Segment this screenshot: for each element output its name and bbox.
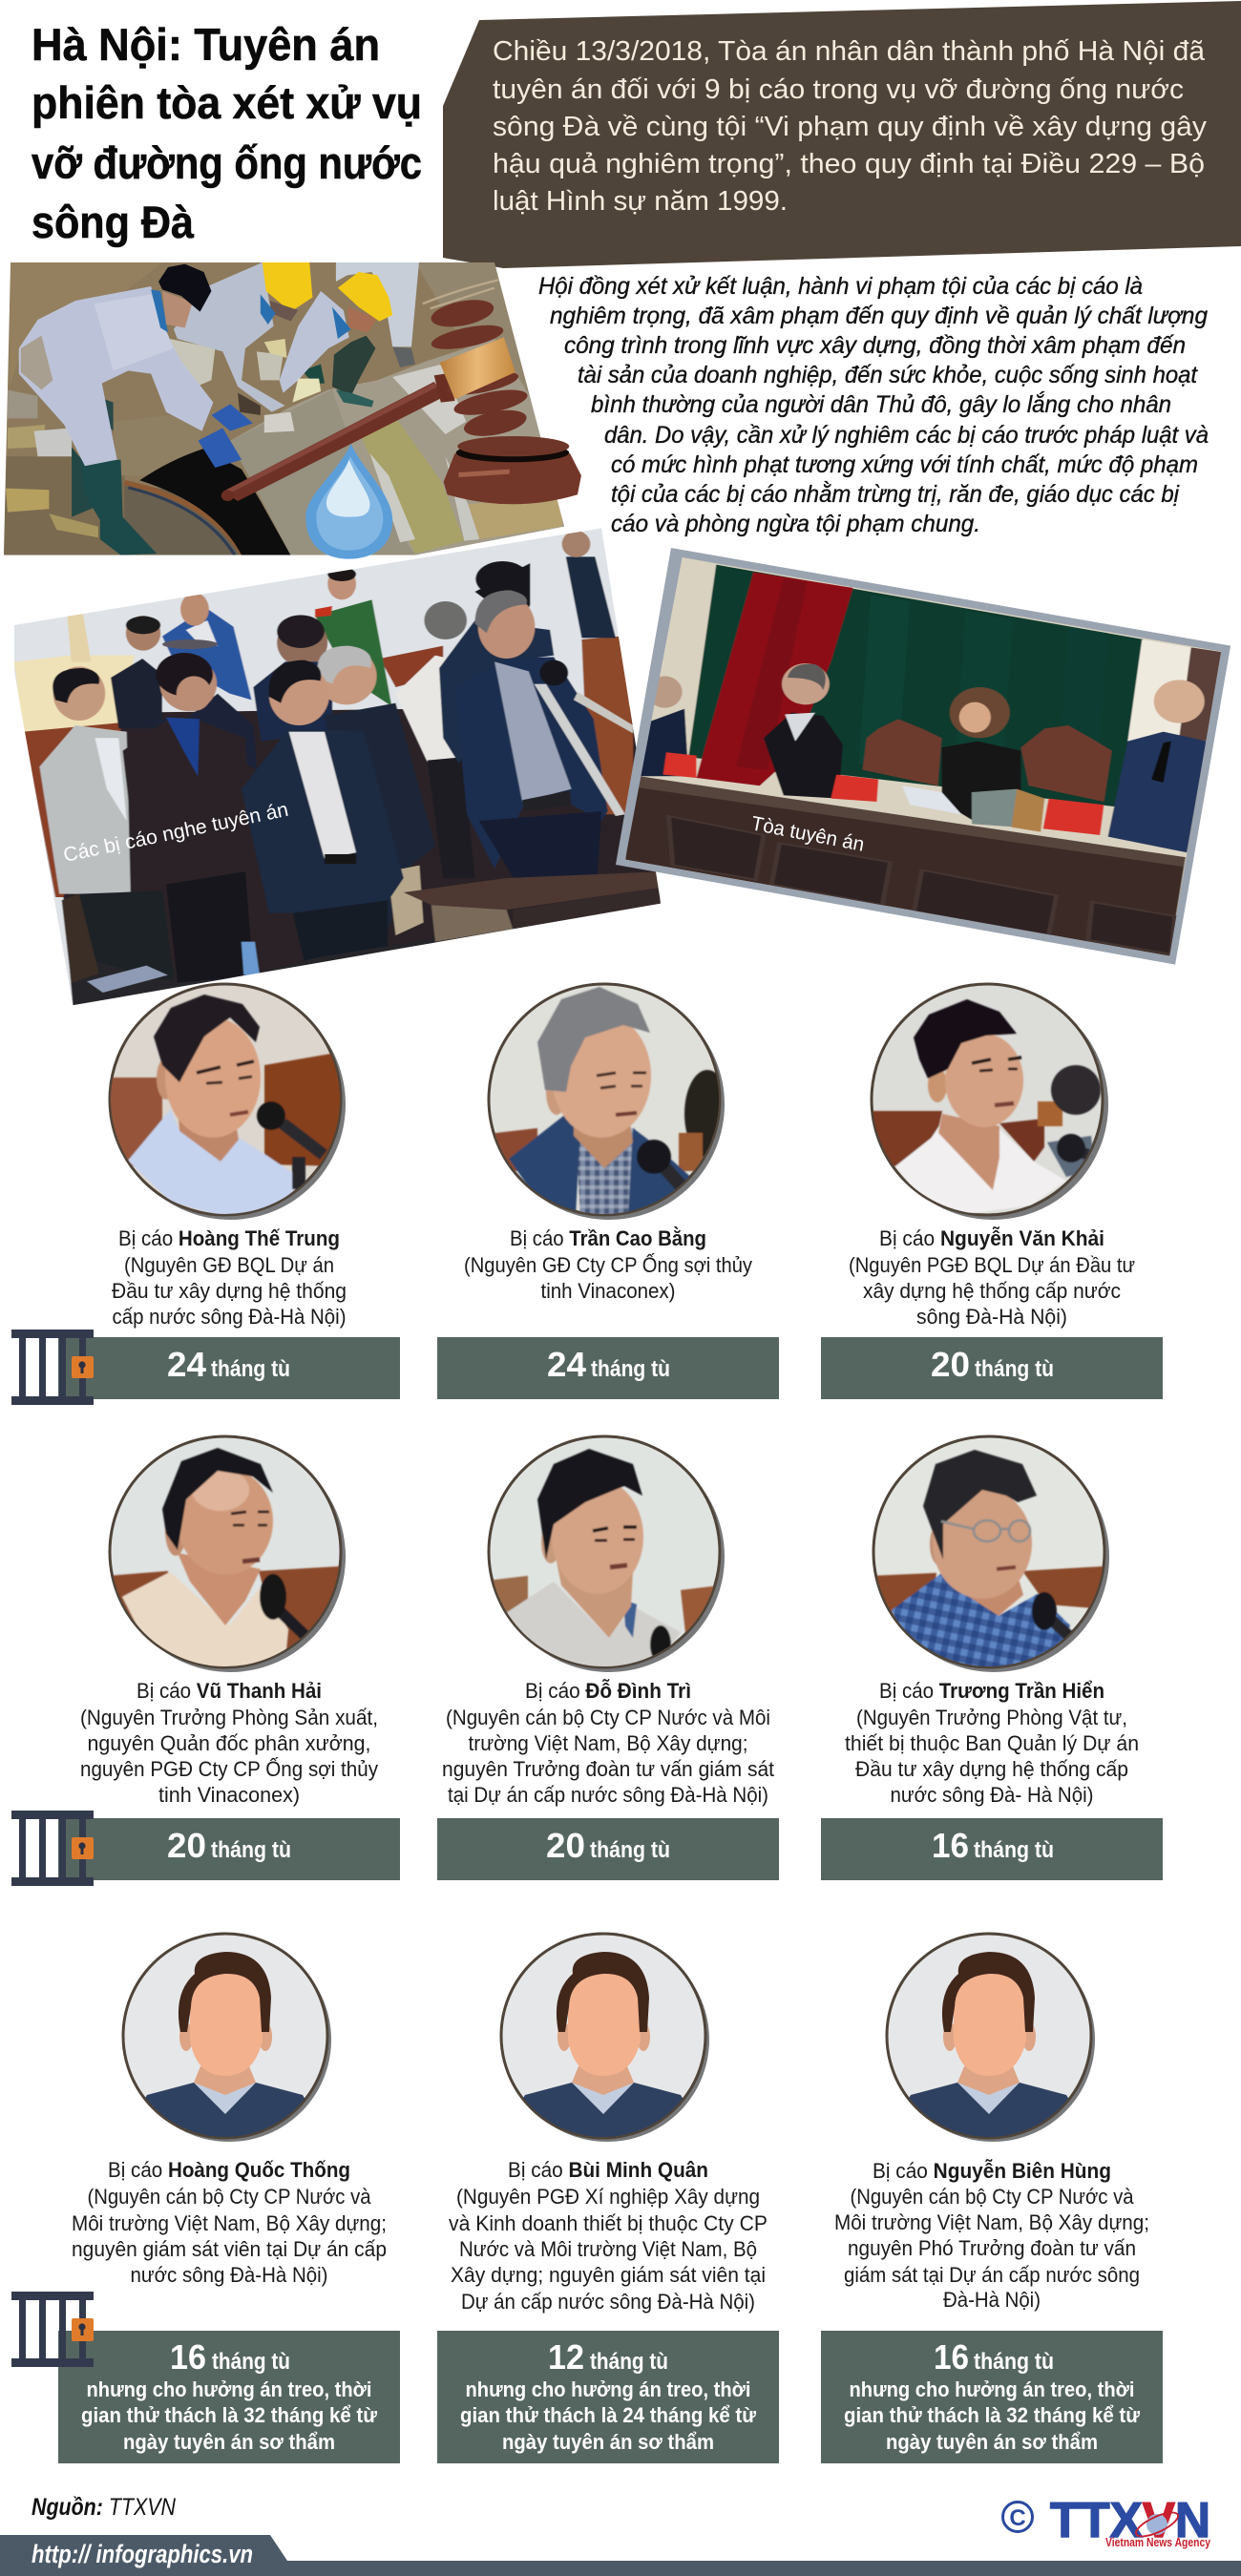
name and role: giám sát tại Dự án cấp nước sông <box>844 2263 1140 2287</box>
source: Nguồn: TTXVN <box>32 2494 177 2521</box>
card: Trần Cao Bằng <box>437 984 779 1399</box>
sentence bar: 16 <box>170 2337 206 2377</box>
portrait <box>109 1436 346 1672</box>
name and role: (Nguyên PGĐ BQL Dự án Đầu tư <box>849 1253 1135 1277</box>
sentence bar: gian thử thách là 32 tháng kể từ <box>81 2403 377 2427</box>
footer band with url <box>0 2535 1241 2576</box>
sentence bar: ngày tuyên án sơ thẩm <box>502 2430 714 2454</box>
logo: TTXVN: TTXVN <box>1050 2493 1210 2548</box>
sentence bar <box>58 1818 400 1880</box>
paragraph: court conclusion: công trình trong lĩnh vực xây dựng, đồng thời xâm phạm đến <box>564 332 1186 359</box>
sentence bar: tháng tù <box>590 2349 668 2375</box>
sentence bar: 24 <box>547 1345 586 1384</box>
name and role: Bị cáo Đỗ Đình Trì <box>525 1679 691 1703</box>
sentence bar: nhưng cho hưởng án treo, thời <box>850 2377 1134 2401</box>
name and role: (Nguyên cán bộ Cty CP Nước và <box>88 2185 371 2209</box>
name and role: Xây dựng; nguyên giám sát viên tại <box>451 2263 766 2287</box>
name and role: Đầu tư xây dựng hệ thống <box>112 1279 347 1303</box>
panel: intro summary: luật Hình sự năm 1999. <box>493 186 788 217</box>
title <box>32 19 422 247</box>
photo: workers repairing pipe with gavel and water drop <box>0 260 581 559</box>
name and role: nguyên Phó Trưởng đoàn tư vấn <box>848 2236 1136 2260</box>
name and role: Bị cáo Vũ Thanh Hải <box>137 1679 322 1703</box>
paragraph: court conclusion: Hội đồng xét xử kết luận, hành vi phạm tội của các bị cáo là <box>538 273 1143 300</box>
sentence bar <box>58 1337 400 1399</box>
name and role <box>112 1226 347 1329</box>
name and role <box>849 1226 1135 1329</box>
card: Nguyễn Văn Khải <box>821 984 1163 1399</box>
logo: TTXVN: Vietnam News Agency <box>1105 2535 1211 2549</box>
sentence bar <box>437 1818 779 1880</box>
icon: jail bars <box>11 1811 94 1886</box>
name and role: và Kinh doanh thiết bị thuộc Cty CP <box>449 2211 768 2235</box>
sentence bar: tháng tù <box>974 1837 1054 1863</box>
sentence bar: 20 <box>167 1826 206 1865</box>
portrait: avatar placeholder <box>120 1934 331 2142</box>
portrait: avatar placeholder <box>498 1934 709 2142</box>
sentence bar: tháng tù <box>975 1356 1054 1382</box>
logo: TTXVN: C <box>1009 2505 1026 2531</box>
name and role: Đầu tư xây dựng hệ thống cấp <box>855 1757 1128 1781</box>
panel: intro summary: sông Đà về cùng tội “Vi phạm quy định về xây dựng gây <box>493 112 1208 142</box>
paragraph: court conclusion: tài sản của doanh nghiệp, đến sức khỏe, cuộc sống sinh hoạt <box>578 362 1198 388</box>
sentence bar: tháng tù <box>974 2349 1054 2375</box>
footer band with url: http:// infographics.vn <box>32 2540 253 2568</box>
name and role: (Nguyên PGĐ Xí nghiệp Xây dựng <box>456 2185 760 2209</box>
name and role: nước sông Đà- Hà Nội) <box>890 1783 1094 1807</box>
name and role: Dự án cấp nước sông Đà-Hà Nội) <box>461 2290 755 2314</box>
sentence bar <box>437 1337 779 1399</box>
name and role: trường Việt Nam, Bộ Xây dựng; <box>468 1731 748 1755</box>
name and role: thiết bị thuộc Ban Quản lý Dự án <box>845 1731 1139 1755</box>
paragraph: court conclusion <box>538 273 1209 537</box>
panel: intro summary: Chiều 13/3/2018, Tòa án nhân dân thành phố Hà Nội đã <box>493 36 1206 67</box>
sentence bar <box>821 1818 1163 1880</box>
sentence bar <box>821 1337 1163 1399</box>
name and role: cấp nước sông Đà-Hà Nội) <box>113 1305 346 1329</box>
card: Trương Trần Hiển <box>821 1436 1163 1880</box>
name and role: Bị cáo Trương Trần Hiển <box>879 1679 1104 1703</box>
name and role <box>442 1679 774 1807</box>
caption: court: Tòa tuyên án <box>749 812 866 856</box>
name and role: Bị cáo Nguyễn Biên Hùng <box>873 2159 1111 2183</box>
name and role <box>845 1679 1139 1807</box>
title: Hà Nội: Tuyên án <box>32 19 380 70</box>
title: phiên tòa xét xử vụ <box>32 77 422 128</box>
portrait <box>488 984 730 1220</box>
portrait <box>871 984 1108 1220</box>
sentence bar: nhưng cho hưởng án treo, thời <box>466 2377 750 2401</box>
name and role: nguyên Quản đốc phân xưởng, <box>88 1731 370 1755</box>
title: sông Đà <box>32 197 195 247</box>
title: vỡ đường ống nước <box>32 137 422 188</box>
sentence bar <box>821 2331 1163 2463</box>
name and role: xây dựng hệ thống cấp nước <box>863 1279 1121 1303</box>
sentence bar: tháng tù <box>211 1356 290 1382</box>
name and role: nguyên giám sát viên tại Dự án cấp <box>72 2237 387 2261</box>
paragraph: court conclusion: tội của các bị cáo nhằm trừng trị, răn đe, giáo dục các bị <box>611 480 1180 508</box>
sentence bar: 20 <box>546 1826 585 1865</box>
sentence bar: tháng tù <box>590 1837 670 1863</box>
name and role <box>834 2159 1149 2312</box>
card: Nguyễn Biên Hùng <box>821 1934 1163 2463</box>
paragraph: court conclusion: nghiêm trọng, đã xâm phạm đến quy định về quản lý chất lượng <box>550 303 1208 329</box>
name and role: Bị cáo Nguyễn Văn Khải <box>879 1226 1104 1250</box>
card: Hoàng Quốc Thống <box>11 1934 400 2463</box>
photo: court panel reading the verdict <box>616 548 1234 965</box>
name and role: Bị cáo Hoàng Thế Trung <box>118 1226 340 1250</box>
paragraph: court conclusion: cáo và phòng ngừa tội phạm chung. <box>611 511 980 537</box>
card: Bùi Minh Quân <box>437 1934 779 2463</box>
name and role: tại Dự án cấp nước sông Đà-Hà Nội) <box>448 1783 768 1807</box>
sentence bar: ngày tuyên án sơ thẩm <box>886 2430 1098 2454</box>
name and role: Bị cáo Trần Cao Bằng <box>510 1226 706 1250</box>
name and role: Đà-Hà Nội) <box>943 2288 1041 2312</box>
name and role <box>80 1679 378 1807</box>
sentence bar: 16 <box>932 1826 969 1865</box>
name and role: nguyên PGĐ Cty CP Ống sợi thủy <box>80 1756 378 1781</box>
name and role: (Nguyên Trưởng Phòng Sản xuất, <box>80 1706 378 1729</box>
sentence bar: tháng tù <box>211 1837 291 1863</box>
name and role: Bị cáo Hoàng Quốc Thống <box>108 2158 350 2182</box>
name and role: (Nguyên GĐ Cty CP Ống sợi thủy <box>464 1252 752 1277</box>
panel: intro summary <box>443 1 1241 268</box>
sentence bar: ngày tuyên án sơ thẩm <box>123 2430 335 2454</box>
name and role: tinh Vinaconex) <box>158 1783 300 1807</box>
sentence bar: nhưng cho hưởng án treo, thời <box>86 2377 372 2401</box>
card: Đỗ Đình Trì <box>437 1436 779 1880</box>
portrait: avatar placeholder <box>884 1934 1095 2142</box>
name and role: Nước và Môi trường Việt Nam, Bộ <box>459 2237 757 2261</box>
name and role: nước sông Đà-Hà Nội) <box>130 2263 328 2287</box>
name and role: (Nguyên GĐ BQL Dự án <box>124 1253 334 1277</box>
name and role: Môi trường Việt Nam, Bộ Xây dựng; <box>834 2210 1149 2234</box>
panel: intro summary: tuyên án đối với 9 bị cáo trong vụ vỡ đường ống nước <box>493 74 1184 105</box>
sentence bar: gian thử thách là 24 tháng kể từ <box>460 2403 756 2427</box>
name and role: nguyên Trưởng đoàn tư vấn giám sát <box>442 1757 774 1781</box>
paragraph: court conclusion: dân. Do vậy, cần xử lý nghiêm các bị cáo trước pháp luật và <box>604 422 1209 449</box>
panel: intro summary: hậu quả nghiêm trọng”, theo quy định tại Điều 229 – Bộ <box>493 149 1205 179</box>
name and role: tinh Vinaconex) <box>540 1279 676 1303</box>
name and role: sông Đà-Hà Nội) <box>916 1305 1067 1329</box>
portrait <box>873 1436 1109 1672</box>
name and role <box>72 2158 387 2287</box>
portrait <box>488 1436 725 1672</box>
name and role: (Nguyên cán bộ Cty CP Nước và Môi <box>446 1706 770 1729</box>
sentence bar <box>437 2331 779 2463</box>
sentence bar: 16 <box>934 2337 969 2377</box>
sentence bar <box>58 2331 400 2463</box>
portrait <box>109 984 346 1220</box>
name and role <box>464 1226 752 1303</box>
icon: jail bars <box>11 2292 94 2367</box>
card: Hoàng Thế Trung <box>11 984 400 1405</box>
name and role: Bị cáo Bùi Minh Quân <box>508 2158 708 2182</box>
icon: jail bars <box>11 1330 94 1405</box>
sentence bar: tháng tù <box>212 2349 290 2375</box>
photo: defendants listening to the verdict <box>0 525 673 1012</box>
paragraph: court conclusion: bình thường của người dân Thủ đô, gây lo lắng cho nhân <box>591 390 1171 418</box>
paragraph: court conclusion: có mức hình phạt tương xứng với tính chất, mức độ phạm <box>611 451 1198 478</box>
caption: defendants: Các bị cáo nghe tuyên án <box>61 799 290 867</box>
sentence bar: 20 <box>931 1345 970 1384</box>
name and role: (Nguyên cán bộ Cty CP Nước và <box>850 2185 1134 2209</box>
name and role <box>449 2158 768 2314</box>
name and role: (Nguyên Trưởng Phòng Vật tư, <box>856 1706 1127 1729</box>
sentence bar: 24 <box>167 1345 206 1384</box>
sentence bar: gian thử thách là 32 tháng kể từ <box>844 2403 1140 2427</box>
sentence bar: 12 <box>548 2337 584 2377</box>
card: Vũ Thanh Hải <box>11 1436 400 1886</box>
name and role: Môi trường Việt Nam, Bộ Xây dựng; <box>72 2211 387 2235</box>
sentence bar: tháng tù <box>591 1356 670 1382</box>
